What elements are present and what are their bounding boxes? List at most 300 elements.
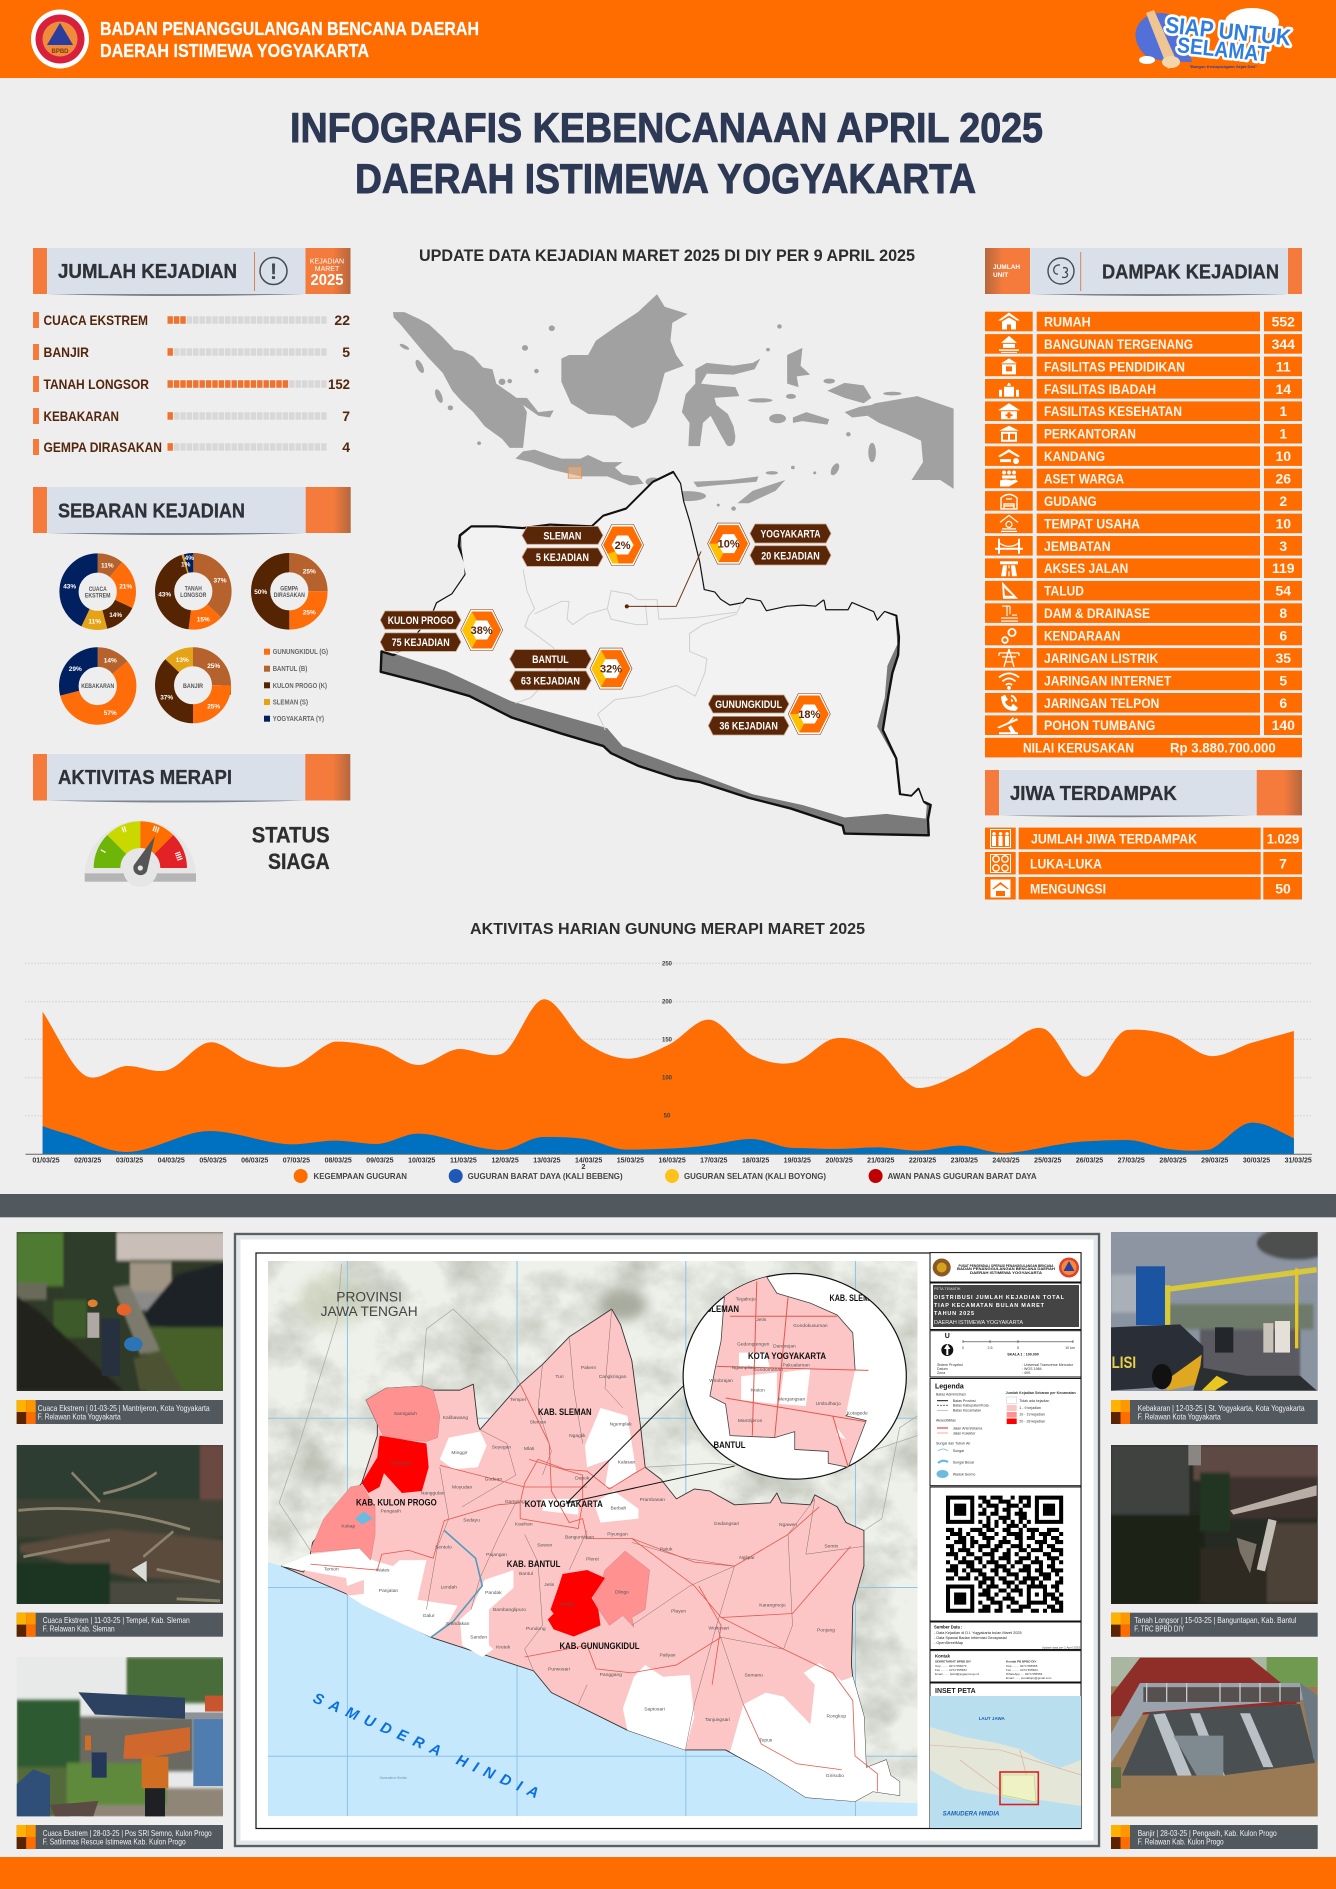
status text: SIAGA: [268, 849, 330, 874]
map district labels: Wates: [376, 1568, 390, 1573]
row: kebakaran: 7: [342, 408, 350, 424]
callout: bantul: 32%: [600, 664, 622, 676]
panel: aktivitas merapi: [33, 754, 350, 887]
area chart: 03/03/25: [116, 1158, 143, 1164]
icon: BPBD logo: [31, 10, 89, 68]
scale and north arrow: SKALA 1 : 100.000: [1007, 1352, 1039, 1356]
area chart: 24/03/25: [992, 1158, 1020, 1164]
row: jumlah jiwa terdampak: JUMLAH JIWA TERDAMPAK: [1031, 830, 1197, 846]
table row labels: JARINGAN LISTRIK: [1044, 650, 1158, 666]
icon: tempat usaha: [1000, 515, 1018, 531]
heading banner: dampak kejadian: UNIT: [993, 272, 1008, 279]
map district labels: Kasihan: [515, 1522, 533, 1526]
map district labels: Wirobrajan: [709, 1378, 733, 1383]
legend: Jalan Arteri/Utama: [953, 1426, 982, 1430]
table row values: 10: [1276, 515, 1291, 531]
legend: Batas Kecamatan: [953, 1408, 981, 1412]
table row labels: RUMAH: [1044, 314, 1091, 330]
icon: BPBD logo: BPBD: [51, 49, 69, 55]
map district labels: Bantul: [519, 1571, 533, 1576]
table row values: 344: [1272, 336, 1295, 352]
legend: Sungai dan Tubuh Air: [936, 1441, 971, 1445]
scale and north arrow: Sistem Proyeksi: [937, 1363, 963, 1367]
icon: kendaraan: [1002, 629, 1016, 643]
caption: pos sri semno: F. Satlinmas Rescue Istimewa Kab. Kulon Progo: [43, 1836, 186, 1846]
table row values: 552: [1272, 314, 1295, 330]
section divider band: [0, 1194, 1336, 1217]
callout: yogyakarta: [708, 523, 831, 565]
map: kejadian per kecamatan: [268, 1261, 920, 1817]
icon: status gauge: I: [99, 848, 108, 854]
callout: gunungkidul: 36 KEJADIAN: [719, 721, 778, 733]
label: provinsi jawa tengah: [320, 1292, 417, 1316]
caption: st yogyakarta: F. Relawan Kota Yogyakarta: [1138, 1412, 1221, 1422]
row: tanah longsor: TANAH LONGSOR: [44, 376, 149, 392]
callout: kulon progo: [380, 610, 503, 651]
map district labels: Girisubo: [826, 1773, 844, 1778]
icon: aset warga: [1000, 470, 1018, 486]
table row values: 6: [1279, 628, 1287, 644]
logos and institution: PUSAT PENGENDALI OPERASI PENANGGULANGAN BENCANA: [958, 1264, 1054, 1268]
scale and north arrow: Datum: [937, 1367, 948, 1371]
photo: cuaca ekstrem mantrijeron: [16, 1231, 227, 1393]
map district labels: Ngampilan: [732, 1365, 756, 1370]
icon: siap untuk selamat logo: SELAMAT: [1176, 32, 1271, 67]
map district labels: Dlingo: [615, 1590, 629, 1594]
scale and north arrow: 5: [1017, 1346, 1019, 1350]
icon: status gauge: III: [151, 824, 161, 835]
scale and north arrow: 0: [962, 1346, 964, 1350]
area chart: 04/03/25: [158, 1158, 185, 1164]
row: banjir: [33, 344, 350, 360]
donut: cuaca ekstrem: CUACA: [89, 587, 107, 593]
map district labels: Gamping: [505, 1499, 525, 1504]
map region labels: BANTUL: [714, 1440, 746, 1450]
chart legend: kabupaten: YOGYAKARTA (Y): [273, 716, 324, 723]
icon: dam dan drainase: [1001, 606, 1018, 621]
donut: cuaca ekstrem: [63, 562, 132, 626]
contacts: Kontak PB BPBD DIY: [1006, 1660, 1036, 1664]
contacts: Telp ........ 0274 555679: [935, 1664, 967, 1668]
legend: Aksesibilitas: [936, 1418, 956, 1422]
donut: gempa dirasakan: GEMPA: [280, 586, 299, 592]
table row labels: [1023, 314, 1276, 756]
leader lines to inset: [567, 1386, 734, 1503]
chart legend: kabupaten: KULON PROGO (K): [273, 683, 327, 690]
map: daerah istimewa yogyakarta: [381, 472, 931, 835]
area chart: 25/03/25: [1034, 1158, 1062, 1164]
map region labels: KAB. KULON PROGO: [356, 1498, 437, 1508]
chart legend: kabupaten: GUNUNGKIDUL (G): [273, 649, 328, 656]
map district labels: Kalasan: [618, 1460, 636, 1464]
map district labels: Srandakan: [446, 1621, 470, 1626]
table row labels: TALUD: [1044, 583, 1084, 599]
map title block: TAHUN 2025: [934, 1311, 974, 1317]
callout: bantul: [510, 648, 632, 690]
area chart: 01/03/25: [32, 1158, 60, 1164]
row: luka-luka: 7: [1279, 855, 1287, 871]
caption: st yogyakarta: [1111, 1400, 1318, 1424]
panel: jiwa terdampak: [985, 770, 1302, 900]
area chart: 100: [662, 1076, 673, 1082]
donut: banjir: 25%: [207, 704, 220, 710]
caption: banguntapan: [1111, 1613, 1318, 1637]
table row values: 1: [1279, 426, 1287, 442]
map district labels: Pakualaman: [782, 1363, 810, 1367]
scale and north arrow: 10 km: [1065, 1346, 1075, 1350]
inset map: SAMUDERA HINDIA: [943, 1812, 999, 1818]
icon: fasilitas pendidikan: [1001, 358, 1017, 374]
donut: tanah longsor: 37%: [213, 578, 227, 584]
data sources: - Data Spasial Badan Informasi Geospasial: [934, 1636, 1007, 1640]
chart legend: AWAN PANAS GUGURAN BARAT DAYA: [888, 1171, 1037, 1181]
map district labels: Berbah: [610, 1506, 627, 1510]
map district labels: Wonosari: [709, 1626, 729, 1631]
map district labels: Cangkringan: [599, 1374, 627, 1379]
donut: banjir: BANJIR: [183, 684, 204, 690]
table row values: 140: [1272, 717, 1295, 733]
table row labels: POHON TUMBANG: [1044, 717, 1155, 733]
map district labels: Girimulyo: [391, 1461, 412, 1465]
qr code: [946, 1496, 1063, 1613]
table row values: 3: [1279, 538, 1287, 554]
map district labels: Minggir: [451, 1450, 468, 1455]
contacts: [935, 1654, 1052, 1680]
map district labels: Pengasih: [381, 1509, 401, 1514]
map district labels: Mlati: [524, 1446, 534, 1451]
photo: cuaca ekstrem tempel: [16, 1444, 224, 1605]
map district labels: Kokap: [341, 1524, 356, 1528]
map title block: TIAP KECAMATAN BULAN MARET: [934, 1303, 1045, 1309]
table row values: 11: [1276, 358, 1291, 374]
icon: perkantoran: [999, 426, 1019, 442]
logos and institution: [933, 1258, 1079, 1278]
donut: banjir: 13%: [176, 657, 189, 664]
map district labels: Pakem: [581, 1365, 596, 1370]
legend: [935, 1384, 1076, 1478]
area chart: 21/03/25: [867, 1158, 895, 1164]
panel: sebaran kejadian: [33, 487, 351, 723]
callout: gunungkidul: 18%: [798, 709, 821, 721]
area chart: [26, 961, 1312, 1171]
caption: pengasih: Banjir | 28-03-25 | Pengasih, Kab. Kulon Progo: [1138, 1828, 1277, 1838]
legend: Sungai Besar: [953, 1460, 975, 1464]
area chart: 12/03/25: [491, 1158, 519, 1164]
inset map: INSET PETA: [935, 1688, 976, 1695]
kecamatan boundaries: [426, 1309, 864, 1750]
map section heading: UPDATE DATA KEJADIAN MARET 2025 DI DIY PER 9 APRIL 2025: [419, 246, 915, 265]
heading banner: jumlah kejadian: 2025: [310, 272, 344, 289]
table row values: 5: [1279, 672, 1287, 688]
map region labels: KAB. GUNUNGKIDUL: [560, 1641, 640, 1651]
photo: cuaca ekstrem pos sri semno: [16, 1656, 227, 1818]
table row labels: NILAI KERUSAKAN: [1023, 740, 1134, 756]
leader dot: [625, 604, 629, 608]
area chart: 14/03/25: [575, 1158, 602, 1164]
row: gempa dirasakan: [33, 439, 350, 455]
legend: Jumlah Kejadian Sebaran per Kecamatan: [1006, 1391, 1076, 1395]
table row labels: ASET WARGA: [1044, 470, 1124, 486]
internal boundaries: [515, 569, 741, 730]
area chart: 23/03/25: [951, 1158, 978, 1164]
map district labels: [324, 1297, 868, 1778]
logos and institution: BADAN PENANGGULANGAN BENCANA DAERAH: [957, 1267, 1056, 1271]
area chart: 13/03/25: [533, 1158, 561, 1164]
area chart: 150: [662, 1037, 673, 1043]
area chart: 07/03/25: [283, 1158, 310, 1164]
map district labels: Semanu: [745, 1673, 763, 1677]
table row labels: KENDARAAN: [1044, 628, 1120, 644]
legend: 20 - 28 kejadian: [1019, 1420, 1045, 1424]
table row labels: KANDANG: [1044, 448, 1105, 464]
scale and north arrow: U: [945, 1333, 950, 1340]
header band: [0, 0, 1336, 78]
map: indonesia: [393, 294, 954, 511]
map district labels: Pundong: [526, 1626, 546, 1631]
callout: kulon progo: 38%: [471, 625, 493, 637]
table row labels: Rp 3.880.700.000: [1170, 740, 1276, 756]
chart legend: kabupaten: [264, 649, 328, 723]
map district labels: Piyungan: [607, 1532, 628, 1537]
donut: gempa dirasakan: 25%: [303, 610, 316, 616]
donut: tanah longsor: [158, 555, 227, 624]
icon: gudang: [1001, 494, 1017, 509]
label: provinsi jawa tengah: PROVINSI: [336, 1290, 402, 1304]
map district labels: Gedangsari: [714, 1521, 739, 1526]
donut: gempa dirasakan: [254, 563, 318, 620]
map district labels: Kretek: [496, 1645, 511, 1650]
row: gempa dirasakan: 4: [342, 439, 350, 455]
map district labels: Rongkop: [826, 1714, 847, 1718]
map district labels: Panjatan: [379, 1588, 399, 1593]
map district labels: Tepus: [759, 1738, 773, 1743]
map title block: [933, 1285, 1079, 1327]
contacts: SEKRETARIAT BPBD DIY: [935, 1660, 971, 1664]
area chart: 31/03/25: [1285, 1158, 1312, 1164]
donut: kebakaran: 14%: [104, 658, 117, 664]
map title block: PETA TEMATIK: [934, 1287, 961, 1291]
map district labels: Kotagede: [847, 1411, 868, 1415]
table row labels: JEMBATAN: [1044, 538, 1111, 554]
table row values: 54: [1276, 583, 1291, 599]
donut: banjir: [160, 657, 222, 714]
donut: tanah longsor: TANAH: [185, 586, 202, 592]
map district labels: Sleman: [530, 1420, 547, 1424]
area chart: 200: [662, 1000, 673, 1006]
area chart: 19/03/25: [784, 1158, 811, 1164]
map district labels: Karangmojo: [759, 1603, 786, 1607]
callout: yogyakarta: 10%: [718, 539, 740, 551]
map district labels: Ngawen: [779, 1522, 797, 1527]
legend: Batas Provinsi: [953, 1399, 976, 1403]
icon: talud: [1002, 582, 1018, 599]
callout: kulon progo: 75 KEJADIAN: [392, 637, 450, 649]
area chart: 16/03/25: [658, 1158, 686, 1164]
map district labels: Galur: [423, 1613, 435, 1618]
callout: sleman: SLEMAN: [543, 530, 581, 542]
legend: Tidak ada kejadian: [1019, 1399, 1049, 1403]
map district labels: Purwosari: [548, 1667, 570, 1671]
map district labels: Pajangan: [486, 1552, 507, 1557]
table row values: 2: [1279, 493, 1287, 509]
heading banner: jumlah kejadian: KEJADIAN: [310, 258, 344, 266]
logos and institution: DAERAH ISTIMEWA YOGYAKARTA: [970, 1271, 1043, 1275]
map district labels: Jetis: [544, 1582, 555, 1587]
inset circle: [683, 1273, 906, 1479]
area chart: 26/03/25: [1076, 1158, 1103, 1164]
heading banner: dampak kejadian: DAMPAK KEJADIAN: [1102, 262, 1279, 284]
table row values: 1: [1279, 403, 1287, 419]
panel: peta sebaran kejadian: [235, 1234, 1099, 1846]
contacts: Email ....... bpbd@jogjaprov.go.id: [935, 1672, 979, 1676]
title: DAERAH ISTIMEWA YOGYAKARTA: [355, 155, 976, 202]
data sources: - OpenStreetMap: [934, 1641, 963, 1645]
heading banner: dampak kejadian: [985, 248, 1302, 296]
inset labels clipped to circle: [708, 1294, 870, 1312]
area chart: 08/03/25: [325, 1158, 352, 1164]
icon: jaringan listrik: [999, 649, 1019, 667]
scale and north arrow: : WGS 1984: [1022, 1367, 1042, 1371]
caption: tempel: F. Relawan Kab. Sleman: [43, 1624, 115, 1634]
inset map: LAUT JAWA: [979, 1716, 1005, 1721]
table row values: 119: [1272, 560, 1295, 576]
callout: bantul: BANTUL: [532, 654, 569, 666]
icon: fasilitas kesehatan: [998, 403, 1020, 419]
icon: status gauge: II: [121, 824, 128, 834]
table row values: 35: [1276, 650, 1291, 666]
row: tanah longsor: 152: [328, 376, 350, 392]
legend: Waduk Sermo: [953, 1472, 975, 1476]
map district labels: Temon: [324, 1567, 339, 1571]
caption: mantrijeron: F. Relawan Kota Yogyakarta: [38, 1412, 121, 1422]
roads: [310, 1384, 877, 1791]
area chart: 20/03/25: [825, 1158, 853, 1164]
donut: tanah longsor: 1%: [181, 562, 191, 568]
grid lines: [268, 1261, 918, 1816]
scale and north arrow: [937, 1333, 1075, 1375]
donut: cuaca ekstrem: 14%: [109, 612, 122, 619]
map title block: DAERAH ISTIMEWA YOGYAKARTA: [934, 1320, 1024, 1326]
heading banner: sebaran kejadian: SEBARAN KEJADIAN: [58, 500, 245, 522]
map district labels: Lendah: [441, 1585, 457, 1590]
icon: pohon tumbang: [997, 717, 1018, 734]
area chart: 250: [662, 961, 673, 967]
province surface: [393, 473, 927, 819]
icon: akses jalan: [1000, 561, 1018, 576]
chart legend: GUGURAN BARAT DAYA (KALI BEBENG): [468, 1171, 623, 1181]
inset labels clipped to circle: SLEMAN: [706, 1304, 739, 1314]
row: tanah longsor: [33, 376, 350, 392]
table row values: 6: [1279, 695, 1287, 711]
map district labels: Saptosari: [644, 1707, 665, 1711]
chart legend: kabupaten: SLEMAN (S): [273, 700, 308, 706]
map district labels: Mantrijeron: [738, 1418, 763, 1423]
heading banner: jumlah kejadian: JUMLAH KEJADIAN: [58, 261, 237, 283]
legend: 10 - 19 kejadian: [1019, 1412, 1045, 1416]
map region labels: KOTA YOGYAKARTA: [748, 1351, 826, 1361]
province outline with shadow: [381, 472, 931, 835]
row: mengungsi: MENGUNGSI: [1030, 880, 1106, 896]
label: samudera hindia: SAMUDERA HINDIA: [310, 1690, 541, 1802]
area chart: 10/03/25: [408, 1158, 435, 1164]
contacts: Fax ......... 0274 555584: [935, 1668, 967, 1672]
caption: pos sri semno: Cuaca Ekstrem | 28-03-25 | Pos SRI Semno, Kulon Progo: [43, 1828, 212, 1838]
donut: kebakaran: 29%: [69, 666, 82, 673]
callout: kulon progo: KULON PROGO: [388, 615, 454, 627]
donut: tanah longsor: 4%: [185, 555, 194, 562]
chart heading: AKTIVITAS HARIAN GUNUNG MERAPI MARET 2025: [470, 921, 865, 938]
heading banner: aktivitas merapi: [33, 754, 350, 802]
table row values: 26: [1276, 470, 1291, 486]
caption: pos sri semno: [17, 1825, 223, 1849]
donut: kebakaran: [69, 657, 127, 717]
row: mengungsi: 50: [1275, 880, 1291, 896]
row: cuaca ekstrem: 22: [334, 312, 350, 328]
donut: cuaca ekstrem: EKSTREM: [85, 594, 111, 600]
title: [290, 104, 1043, 202]
map district labels: Patuk: [660, 1547, 673, 1551]
area chart: 05/03/25: [199, 1158, 227, 1164]
map district labels: Danurejan: [773, 1344, 796, 1348]
caption: pengasih: [1111, 1825, 1318, 1849]
map district labels: Prambanan: [640, 1497, 665, 1502]
area chart: 09/03/25: [366, 1158, 394, 1164]
table row labels: FASILITAS IBADAH: [1044, 381, 1156, 397]
map district labels: Ngaglik: [569, 1433, 586, 1438]
legend: 1 - 9 kejadian: [1019, 1406, 1041, 1410]
data sources: [934, 1624, 1080, 1649]
map district labels: Jetis: [756, 1317, 767, 1322]
map district labels: Tempel: [510, 1397, 526, 1402]
heading banner: dampak kejadian: JUMLAH: [993, 264, 1020, 271]
icon: siap untuk selamat logo: [1135, 8, 1293, 69]
panel: jumlah kejadian: [33, 248, 350, 455]
heading banner: aktivitas merapi: AKTIVITAS MERAPI: [58, 767, 232, 789]
chart legend: [294, 1169, 1037, 1183]
icon: fasilitas ibadah: [999, 383, 1019, 397]
area chart: 27/03/25: [1118, 1158, 1145, 1164]
donut: kebakaran: KEBAKARAN: [81, 684, 114, 690]
icon: jembatan: [995, 539, 1023, 554]
area chart: 18/03/25: [742, 1158, 769, 1164]
caption: tempel: [17, 1613, 223, 1637]
donut: tanah longsor: LONGSOR: [180, 593, 207, 599]
area chart: 2: [582, 1164, 586, 1171]
photo: kebakaran st yogyakarta: [1111, 1232, 1318, 1391]
heading banner: sebaran kejadian: [33, 487, 351, 535]
icon: status gauge: IIII: [173, 850, 184, 862]
map district labels: Nanggulan: [421, 1491, 445, 1495]
table row values: 14: [1276, 381, 1291, 397]
donut: tanah longsor: 43%: [158, 592, 171, 598]
map title block: DISTRIBUSI JUMLAH KEJADIAN TOTAL: [934, 1295, 1065, 1301]
sea: [268, 1562, 920, 1817]
donut: cuaca ekstrem: 43%: [63, 584, 76, 590]
table row values: 10: [1276, 448, 1291, 464]
chart legend: KEGEMPAAN GUGURAN: [314, 1171, 407, 1181]
header organisation name: [100, 19, 479, 61]
icon: jaringan telpon: [1001, 695, 1018, 711]
row: mengungsi: [985, 877, 1302, 900]
table row labels: JARINGAN TELPON: [1044, 695, 1159, 711]
title: INFOGRAFIS KEBENCANAAN APRIL 2025: [290, 104, 1043, 151]
map district labels: Tegalrejo: [736, 1297, 756, 1301]
caption: mantrijeron: Cuaca Ekstrem | 01-03-25 | Mantrijeron, Kota Yogyakarta: [38, 1403, 210, 1413]
callout: yogyakarta: 20 KEJADIAN: [761, 550, 820, 562]
icon: status gauge: [84, 820, 196, 887]
donut: banjir: 37%: [160, 694, 173, 702]
donut: gempa dirasakan: 50%: [254, 589, 267, 596]
